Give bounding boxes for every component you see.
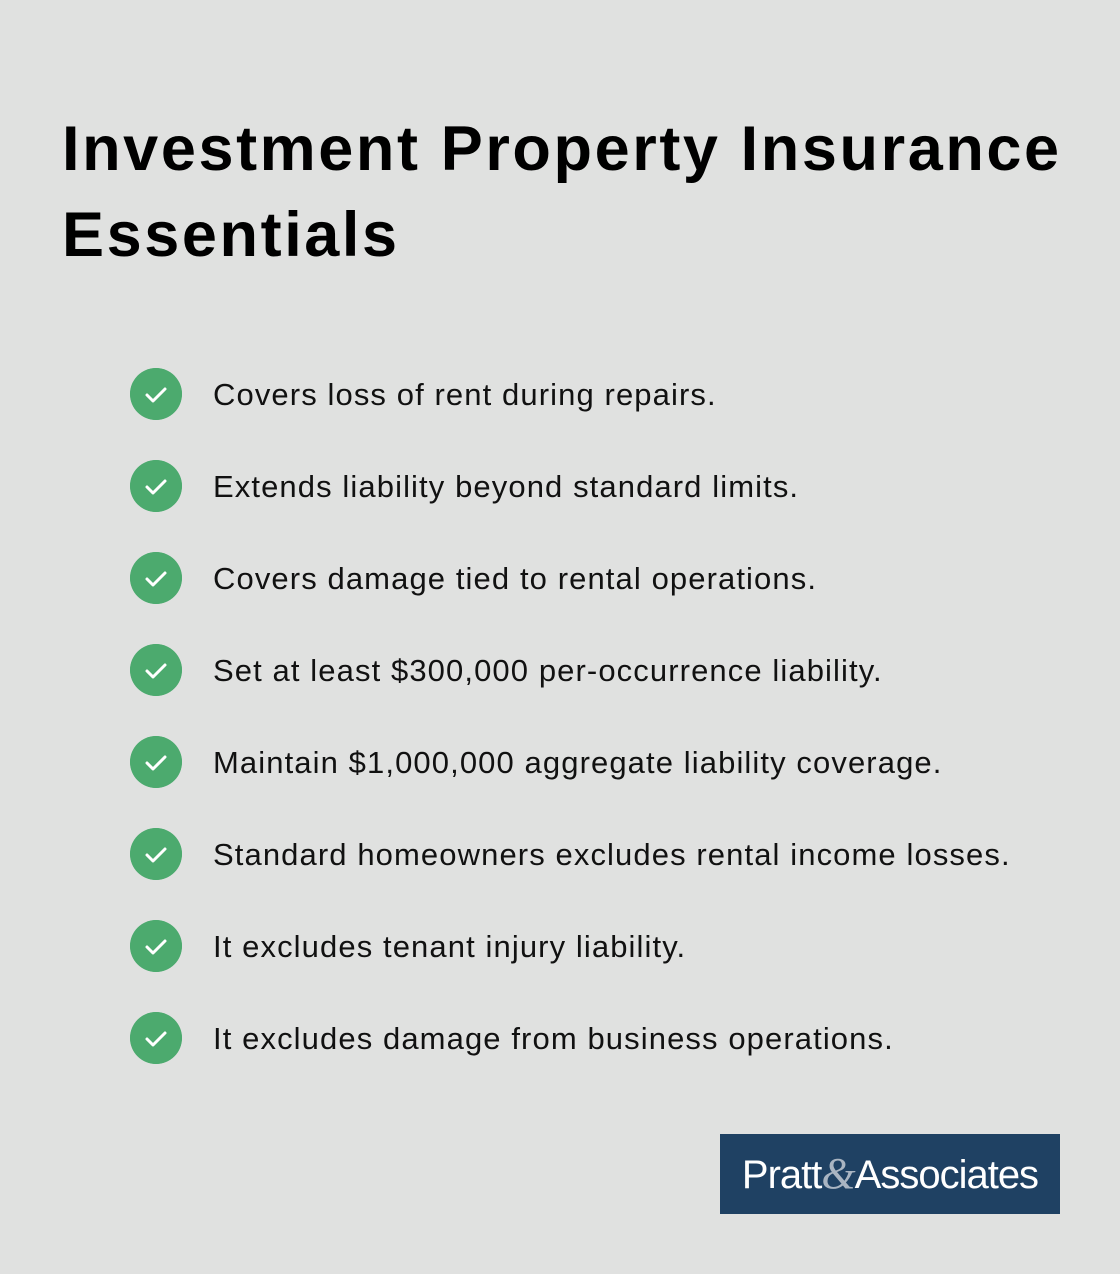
item 4: Set at least $300,000 per-occurrence liability. [213,653,883,688]
item 2: Extends liability beyond standard limits. [213,469,799,504]
item 4 [130,644,883,696]
item 5 [130,736,942,788]
item 8 [130,1012,894,1064]
item 7: It excludes tenant injury liability. [213,929,686,964]
item 1: Covers loss of rent during repairs. [213,377,717,412]
item 6 [130,828,1011,880]
item 1 [130,368,717,420]
title [62,114,1062,270]
item 6: Standard homeowners excludes rental income losses. [213,837,1011,872]
item 3 [130,552,817,604]
title: Investment Property Insurance [62,114,1062,184]
logo: Pratt&Associates [742,1149,1038,1198]
logo [720,1134,1060,1214]
item 7 [130,920,686,972]
title: Essentials [62,200,400,270]
item 3: Covers damage tied to rental operations. [213,561,817,596]
item 5: Maintain $1,000,000 aggregate liability coverage. [213,745,942,780]
item 2 [130,460,799,512]
item 8: It excludes damage from business operations. [213,1021,894,1056]
